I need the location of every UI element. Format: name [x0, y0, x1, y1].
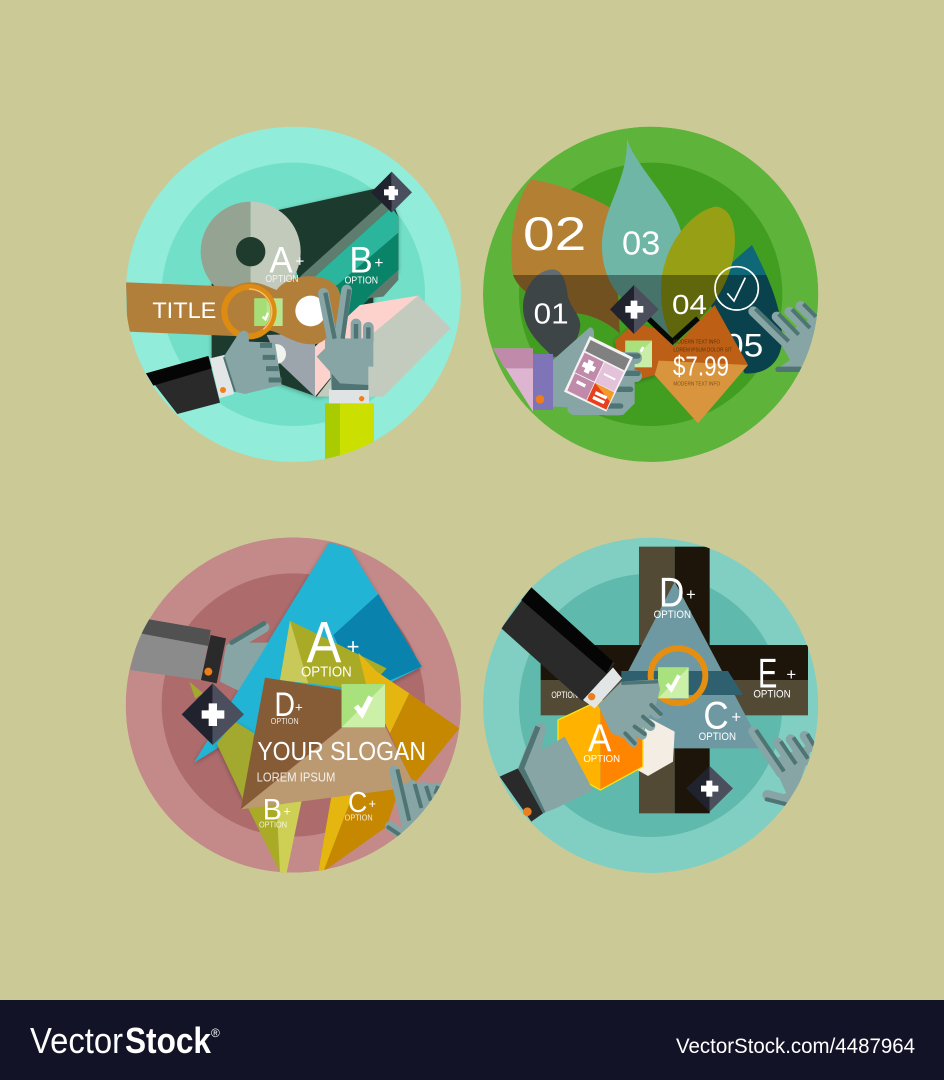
- hand: yellow sleeve victory sign: [317, 289, 374, 460]
- orange diamond bottom: [655, 361, 748, 423]
- footer logo: [30, 1020, 220, 1061]
- title banner: [126, 276, 341, 344]
- inner ring: [162, 163, 425, 426]
- D+ label: +: [295, 700, 303, 715]
- C+ label: OPTION: [699, 731, 736, 743]
- option A panel: [280, 621, 387, 690]
- hexagon A: [558, 700, 643, 790]
- hexagon A: OPTION: [583, 754, 620, 765]
- B+ label: OPTION: [259, 820, 287, 830]
- white cube: [637, 718, 675, 776]
- disc right half: [250, 202, 301, 290]
- orange facet: [390, 693, 459, 785]
- price block: $7.99: [673, 350, 729, 381]
- leaf 01: [523, 269, 580, 357]
- grey-green fold: [317, 296, 451, 397]
- hand with calculator: [493, 327, 638, 415]
- panel: cross options circle: [483, 538, 818, 873]
- pink fold: [315, 296, 418, 397]
- teal panel B: [315, 208, 398, 286]
- footer bar: [0, 1000, 944, 1080]
- price block: MODERN TEXT INFO: [673, 339, 720, 345]
- number 04: 04: [672, 289, 707, 320]
- panel: numbered leaves price circle: [483, 127, 818, 462]
- A+ label: [301, 611, 360, 681]
- check circle: [715, 267, 758, 310]
- orange arrow panel left: [615, 323, 678, 383]
- option C tip: [318, 787, 400, 872]
- dark band across leaves: [508, 275, 785, 378]
- price block: LOREM IPSUM DOLOR SIT: [673, 347, 733, 353]
- B label partly hidden: OPTION: [551, 690, 578, 700]
- price block: MODERN TEXT INFO: [673, 381, 720, 387]
- C+ label: C: [348, 787, 367, 819]
- C+ label: [699, 693, 741, 743]
- white circle: [295, 296, 326, 326]
- cross horizontal top: [541, 645, 808, 680]
- number 01: 01: [534, 298, 569, 330]
- A+ label: OPTION: [265, 274, 299, 285]
- cross vertical left: [639, 547, 675, 813]
- leaf 02: [511, 179, 620, 333]
- C+ label: [345, 787, 376, 822]
- lorem ipsum text: LOREM IPSUM: [257, 770, 335, 784]
- D+ label: D: [659, 569, 684, 616]
- B+ label: OPTION: [345, 275, 378, 286]
- panel: slogan polygons circle: [126, 537, 461, 873]
- outer ring: [483, 127, 818, 462]
- white half circle: [275, 344, 286, 364]
- hand: black sleeve top left: [501, 587, 661, 743]
- footer logo: Stock: [125, 1020, 212, 1061]
- dark green backing shape: [212, 188, 398, 397]
- disc hole: [236, 237, 265, 266]
- green check box: [658, 667, 689, 698]
- green check box: [254, 298, 283, 326]
- leaf 05: [711, 245, 782, 373]
- blue triangle: [588, 582, 763, 748]
- B+ label: +: [283, 804, 291, 818]
- plus diamond: [686, 766, 733, 812]
- hand: right fingers: [388, 769, 442, 835]
- footer logo: ®: [211, 1026, 220, 1040]
- D+ label: +: [686, 585, 696, 604]
- E+ label: [753, 649, 796, 701]
- plus diamond: [371, 172, 412, 213]
- triangle dark band: [621, 671, 743, 695]
- C+ label: +: [731, 708, 741, 727]
- A+ label: +: [347, 634, 360, 659]
- C+ label: C: [703, 693, 729, 737]
- gold facet: [358, 653, 409, 733]
- grey fold: [367, 270, 398, 298]
- A+ label: OPTION: [301, 665, 352, 681]
- A+ label: A: [307, 611, 342, 676]
- panel: grades A B title circle: [126, 127, 461, 462]
- leaf 03: [602, 138, 682, 337]
- hexagon A: A: [588, 717, 612, 761]
- hand: right fingers: [753, 730, 814, 808]
- dark teal panel B: [333, 233, 398, 317]
- D+ label: [654, 569, 696, 621]
- outer ring: [126, 127, 461, 462]
- inner ring: [519, 574, 782, 837]
- D+ label: OPTION: [654, 609, 691, 621]
- plus diamond: [610, 285, 659, 334]
- slogan text: YOUR SLOGAN: [257, 736, 426, 766]
- grey diagonal stripe: [300, 203, 389, 277]
- calculator: [564, 336, 633, 412]
- hand: lower left: [500, 723, 593, 822]
- title text: TITLE: [152, 298, 216, 323]
- A+ label: A: [269, 238, 293, 280]
- cross horizontal bottom: [541, 680, 808, 715]
- footer logo: Vector: [30, 1020, 123, 1061]
- disc left half: [200, 202, 250, 287]
- E+ label: E: [758, 649, 777, 696]
- hand: right pointing fingers: [753, 304, 818, 371]
- option A light facet: [280, 621, 308, 683]
- blue triangle: [194, 542, 422, 763]
- plus diamond: [182, 683, 244, 745]
- C+ label: +: [369, 797, 376, 811]
- green check box: [625, 341, 652, 367]
- inner ring: [519, 163, 782, 426]
- cross vertical right: [675, 547, 710, 813]
- green check box: [342, 684, 385, 727]
- E+ label: OPTION: [753, 689, 791, 701]
- hand: grey sleeve: [130, 618, 268, 691]
- B+ label: +: [374, 255, 383, 272]
- inner ring: [162, 573, 425, 837]
- hand: suit sleeve with thumb up: [146, 331, 282, 414]
- olive tip: [189, 682, 203, 698]
- D+ label: OPTION: [271, 716, 299, 726]
- B+ label: B: [263, 793, 282, 826]
- price block: [673, 339, 733, 387]
- B+ label: [259, 793, 291, 830]
- slogan panel tan: [241, 727, 415, 809]
- A+ label: +: [295, 254, 304, 271]
- leaf 04: [661, 207, 735, 340]
- number 03: 03: [622, 225, 660, 262]
- B+ label: [345, 247, 383, 284]
- progress ring: [651, 648, 705, 703]
- C+ label: OPTION: [345, 812, 373, 822]
- olive left facet: [217, 722, 254, 800]
- footer url: VectorStock.com/4487964: [676, 1035, 915, 1058]
- grey lower panel: [267, 333, 315, 397]
- progress ring: [224, 287, 274, 336]
- dark blue facet: [333, 594, 422, 693]
- outer ring: [126, 537, 461, 873]
- A+ label: [266, 247, 304, 282]
- B+ label: B: [349, 239, 373, 281]
- D+ label: D: [274, 686, 295, 724]
- number 05: 05: [724, 328, 763, 364]
- option B tip: [248, 801, 302, 873]
- black chevron shadow: [646, 317, 698, 342]
- orange diamond top: [668, 305, 748, 365]
- slogan panel brown: [241, 678, 343, 809]
- number 02: 02: [523, 208, 586, 261]
- E+ label: +: [786, 665, 796, 684]
- outer ring: [483, 538, 818, 873]
